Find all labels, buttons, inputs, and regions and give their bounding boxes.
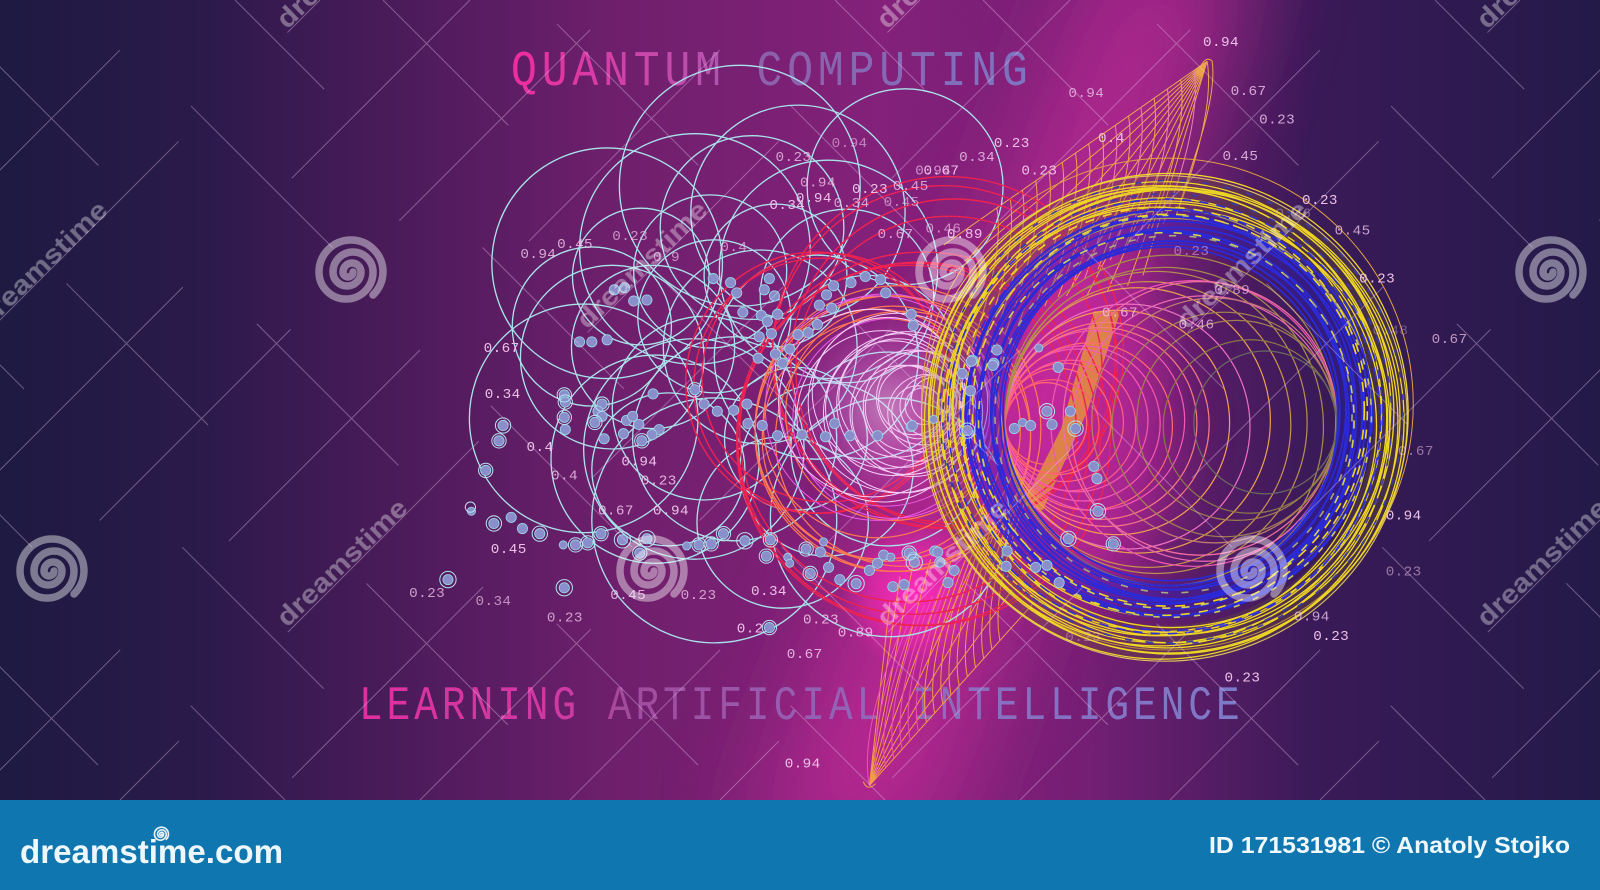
- scattered number labels: 0.9: [653, 250, 680, 266]
- scattered number labels: 0.94: [832, 136, 868, 152]
- scattered number labels: 0.67: [598, 503, 634, 519]
- scattered number labels: 0.67: [1102, 305, 1138, 321]
- scattered number labels: 0.4: [1098, 131, 1125, 147]
- watermark text: dreamstime: [1470, 493, 1600, 632]
- scattered number labels: 0.94: [520, 247, 556, 263]
- scattered number labels: 0.23: [852, 182, 888, 198]
- scattered number labels: 0.23: [1065, 630, 1101, 646]
- outer thin orange ring: [921, 158, 1413, 650]
- watermark text: dreamstime: [570, 195, 713, 334]
- scattered number labels: 0.89: [1214, 283, 1250, 299]
- scattered number labels: 0.94: [785, 756, 821, 772]
- yellow ring band: [921, 173, 1408, 661]
- scattered number labels: 0.94: [1203, 35, 1239, 51]
- watermark spirals: [20, 240, 1583, 598]
- data point dots: [443, 271, 1118, 633]
- blue ring band: [965, 209, 1372, 616]
- cyan circle web: [469, 65, 1009, 643]
- scattered number labels: 0.45: [557, 237, 593, 253]
- dashed ring overlays: [940, 181, 1403, 644]
- scattered number labels: 0.34: [751, 584, 787, 600]
- orange circles: [755, 286, 1041, 571]
- scattered number labels: 0.23: [1173, 244, 1209, 260]
- watermark text: dreamstime: [1170, 195, 1313, 334]
- scattered number labels: 0.23: [1313, 629, 1349, 645]
- spindle: top woven mesh: [944, 59, 1213, 361]
- subtitle: learning artificial intelligence: LEARNING ARTIFICIAL INTELLIGENCE: [359, 680, 1240, 734]
- dot halo rings: [440, 383, 1120, 635]
- scattered number labels: 0.94: [796, 191, 832, 207]
- image id and author credit: ID 171531981 © Anatoly Stojko: [1209, 832, 1570, 858]
- scattered number labels: 0.23: [1224, 671, 1260, 687]
- scattered number labels: 0.45: [610, 588, 646, 604]
- scattered number labels: 0.94: [1068, 86, 1104, 102]
- scattered number labels: 0.67: [1432, 332, 1468, 348]
- scattered number labels: 0.45: [884, 195, 920, 211]
- scattered number labels: 0.94: [1386, 508, 1422, 524]
- glowing pale tunnel: [765, 294, 993, 520]
- bar logo spiral: [154, 827, 168, 840]
- scattered number labels: 0.23: [994, 136, 1030, 152]
- scattered number labels: 0.67: [1398, 444, 1434, 460]
- scattered number labels: 0.67: [923, 163, 959, 179]
- scattered number labels: 0.67: [787, 647, 823, 663]
- interior ring arcs: [1005, 255, 1337, 586]
- scattered number labels: 0.4: [551, 469, 578, 485]
- scattered number labels: 0.4: [720, 240, 747, 256]
- scattered number labels: 0.23: [1259, 112, 1295, 128]
- scattered number labels: 0.46: [1179, 318, 1214, 334]
- scattered number labels: 0.94: [1294, 609, 1330, 625]
- scattered number labels: 0.23: [409, 586, 445, 602]
- scattered number labels: 0.45: [491, 542, 527, 558]
- red circles: [686, 177, 1123, 626]
- scattered number labels: 0.45: [893, 179, 929, 195]
- scattered number labels: 0.34: [834, 196, 870, 212]
- scattered number labels: 0.23: [803, 612, 839, 628]
- scattered number labels: 0.34: [769, 198, 805, 214]
- scattered number labels: 0.67: [878, 227, 913, 243]
- title: quantum computing: QUANTUM COMPUTING: [511, 44, 1028, 101]
- scattered number labels: 0.23: [547, 610, 583, 626]
- scattered number labels: 0.45: [1222, 149, 1258, 165]
- scattered number labels: 0.34: [476, 594, 511, 610]
- scattered number labels: 0.94: [653, 503, 689, 519]
- watermark text: [0, 0, 1600, 632]
- scattered number labels: 0.23: [1359, 272, 1395, 288]
- spindle: bottom woven mesh: [863, 488, 1033, 787]
- watermark text: dreamstime: [270, 493, 413, 632]
- scattered number labels: 0.46: [926, 222, 961, 238]
- scattered number labels: 0.48: [1372, 324, 1408, 340]
- scattered number labels: 0.34: [959, 150, 995, 166]
- spindle: solid gold band: [1022, 311, 1120, 510]
- bar logo text: dreamstime.com: [20, 833, 283, 870]
- bottom credit bar: [0, 800, 1600, 890]
- scattered number labels: 0.94: [800, 176, 836, 192]
- scattered number labels: [409, 35, 1468, 772]
- scattered number labels: 0.23: [1302, 193, 1338, 209]
- watermark text: dreamstime: [870, 493, 1013, 632]
- scattered number labels: 0.34: [485, 387, 521, 403]
- scattered number labels: 0.67: [484, 341, 520, 357]
- scattered number labels: 0.2: [737, 622, 764, 638]
- scattered number labels: 0.23: [681, 588, 716, 604]
- scattered number labels: 0.23: [776, 150, 811, 166]
- scattered number labels: 0.45: [1335, 224, 1371, 240]
- scattered number labels: 0.23: [641, 474, 677, 490]
- scattered number labels: 0.89: [838, 626, 874, 642]
- scattered number labels: 0.23: [1021, 163, 1057, 179]
- scattered number labels: 0.4: [527, 440, 553, 456]
- scattered number labels: 0.67: [1231, 84, 1266, 100]
- scattered number labels: 0.23: [1386, 565, 1422, 581]
- scattered number labels: 0.94: [915, 163, 951, 179]
- scattered number labels: 0.89: [947, 227, 983, 243]
- scattered number labels: 0.46: [1275, 206, 1311, 222]
- scattered number labels: 0.23: [612, 229, 648, 245]
- scattered number labels: 0.94: [621, 454, 657, 470]
